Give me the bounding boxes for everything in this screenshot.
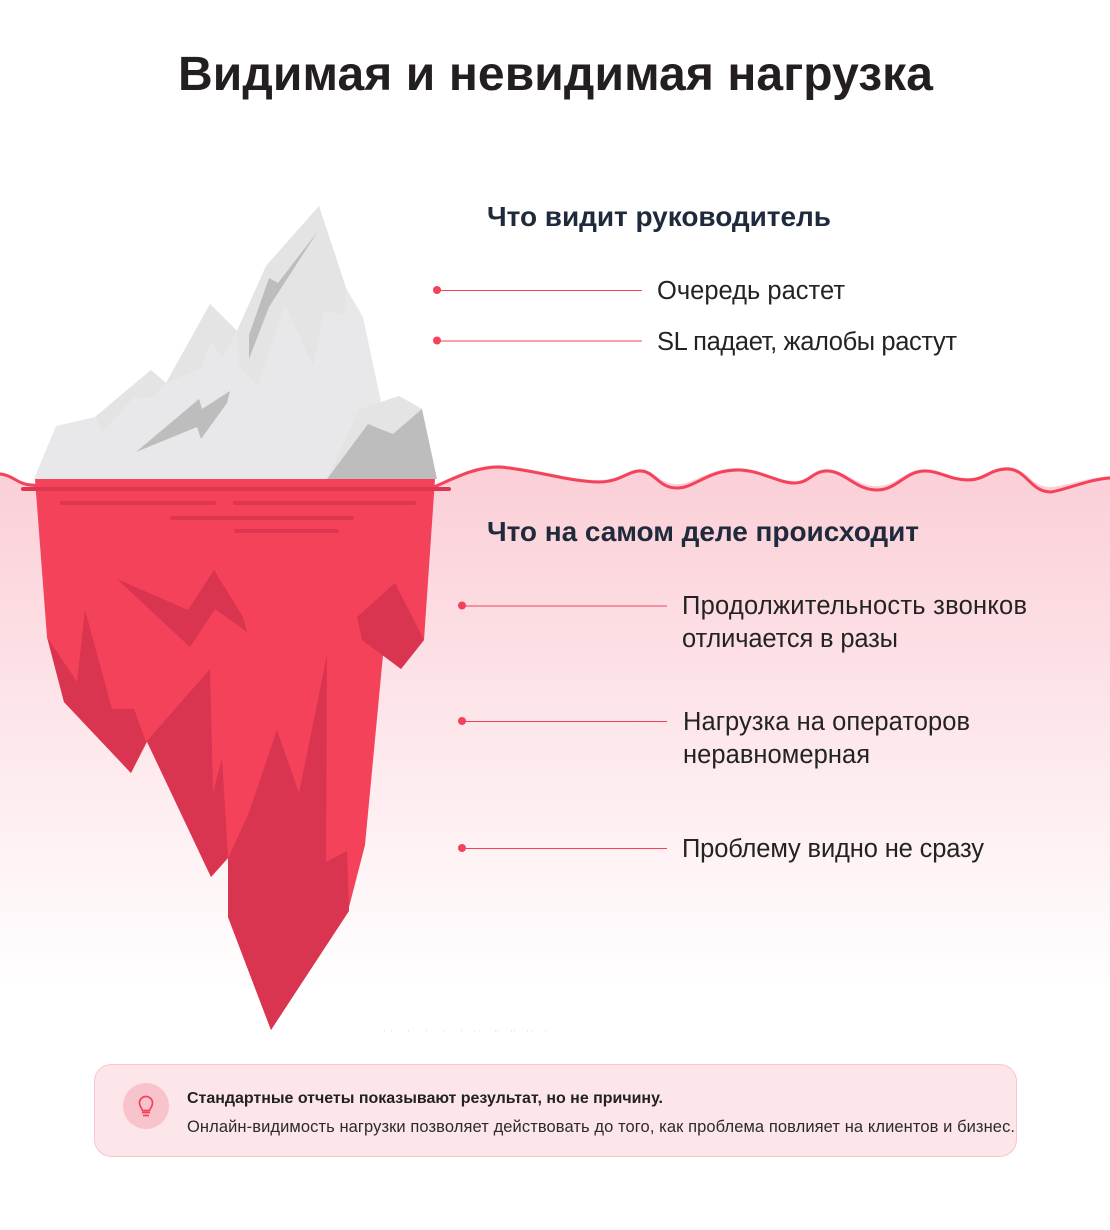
water background bbox=[0, 465, 1110, 1000]
item: problem not visible at once bbox=[458, 835, 984, 863]
item: problem not visible at once: Проблему видно не сразу bbox=[682, 835, 984, 863]
title: Видимая и невидимая нагрузка bbox=[178, 48, 933, 101]
iceberg bbox=[21, 206, 451, 1030]
callout bold line: Стандартные отчеты показывают результат, но не причину. bbox=[187, 1090, 663, 1107]
item: uneven load bbox=[458, 708, 970, 769]
item: call duration: Продолжительность звонков bbox=[682, 592, 1027, 620]
item: uneven load: Нагрузка на операторов bbox=[683, 708, 970, 736]
item: queue grows: Очередь растет bbox=[657, 277, 845, 305]
item: call duration bbox=[458, 592, 1027, 653]
item: call duration: отличается в разы bbox=[682, 625, 898, 653]
icon: light bulb bbox=[123, 1083, 169, 1129]
heading: what really happens: Что на самом деле происходит bbox=[487, 516, 919, 547]
faint dots bbox=[384, 1030, 546, 1032]
callout card bbox=[94, 1064, 1016, 1156]
item: SL falls bbox=[433, 328, 957, 356]
iceberg tip above water bbox=[34, 206, 437, 479]
item: uneven load: неравномерная bbox=[683, 741, 870, 769]
callout regular line: Онлайн-видимость нагрузки позволяет действовать до того, как проблема повлияет на клиентов и бизнес. bbox=[187, 1118, 1015, 1136]
heading: what the manager sees: Что видит руководитель bbox=[487, 201, 831, 232]
item: queue grows bbox=[433, 277, 845, 305]
wave line bbox=[0, 467, 1110, 492]
iceberg underwater body bbox=[21, 479, 451, 1030]
item: SL falls: SL падает, жалобы растут bbox=[657, 328, 957, 356]
